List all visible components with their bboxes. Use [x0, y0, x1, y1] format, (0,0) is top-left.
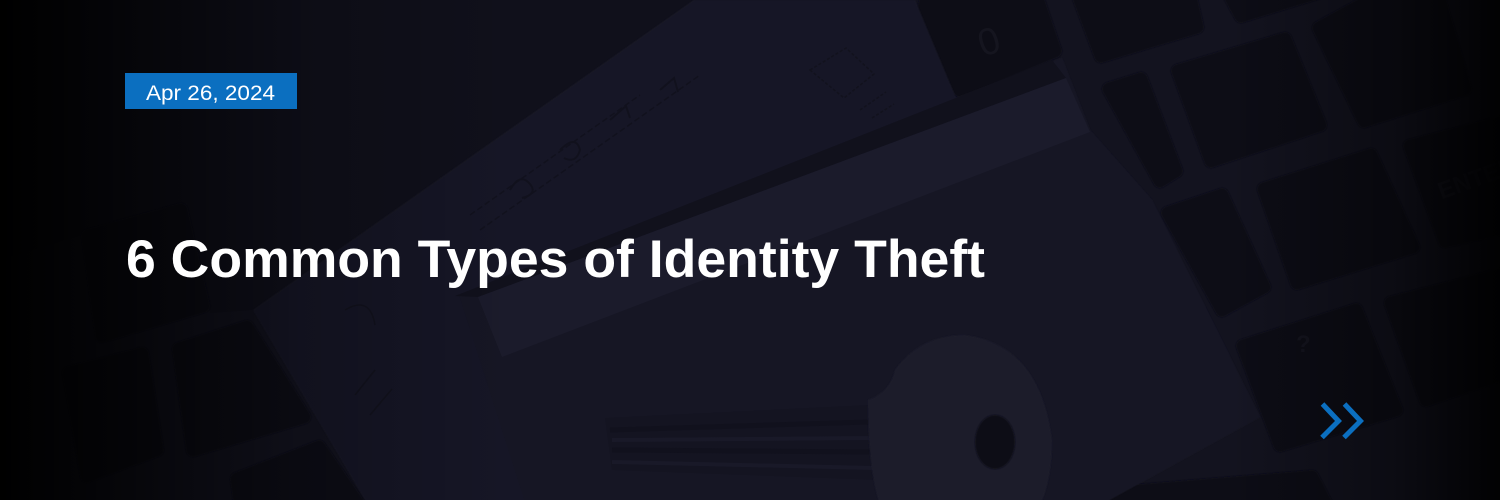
date badge	[125, 73, 297, 109]
icon: double chevron arrow	[1322, 404, 1360, 438]
bank card	[459, 58, 1260, 500]
paper document	[253, 0, 1260, 500]
key labels	[973, 19, 1500, 358]
paper print marks	[345, 48, 894, 415]
title: 6 Common Types of Identity Theft	[126, 230, 985, 289]
key labels: ?	[1296, 331, 1311, 358]
card dark stripe	[455, 60, 1066, 297]
key labels: 0	[973, 19, 1006, 66]
date badge: Apr 26, 2024	[146, 81, 275, 105]
key head	[868, 335, 1052, 500]
key hole	[975, 415, 1015, 469]
key blade	[605, 405, 880, 480]
pen at top left	[0, 0, 694, 313]
card light stripe	[478, 78, 1090, 357]
door key	[605, 335, 1052, 500]
